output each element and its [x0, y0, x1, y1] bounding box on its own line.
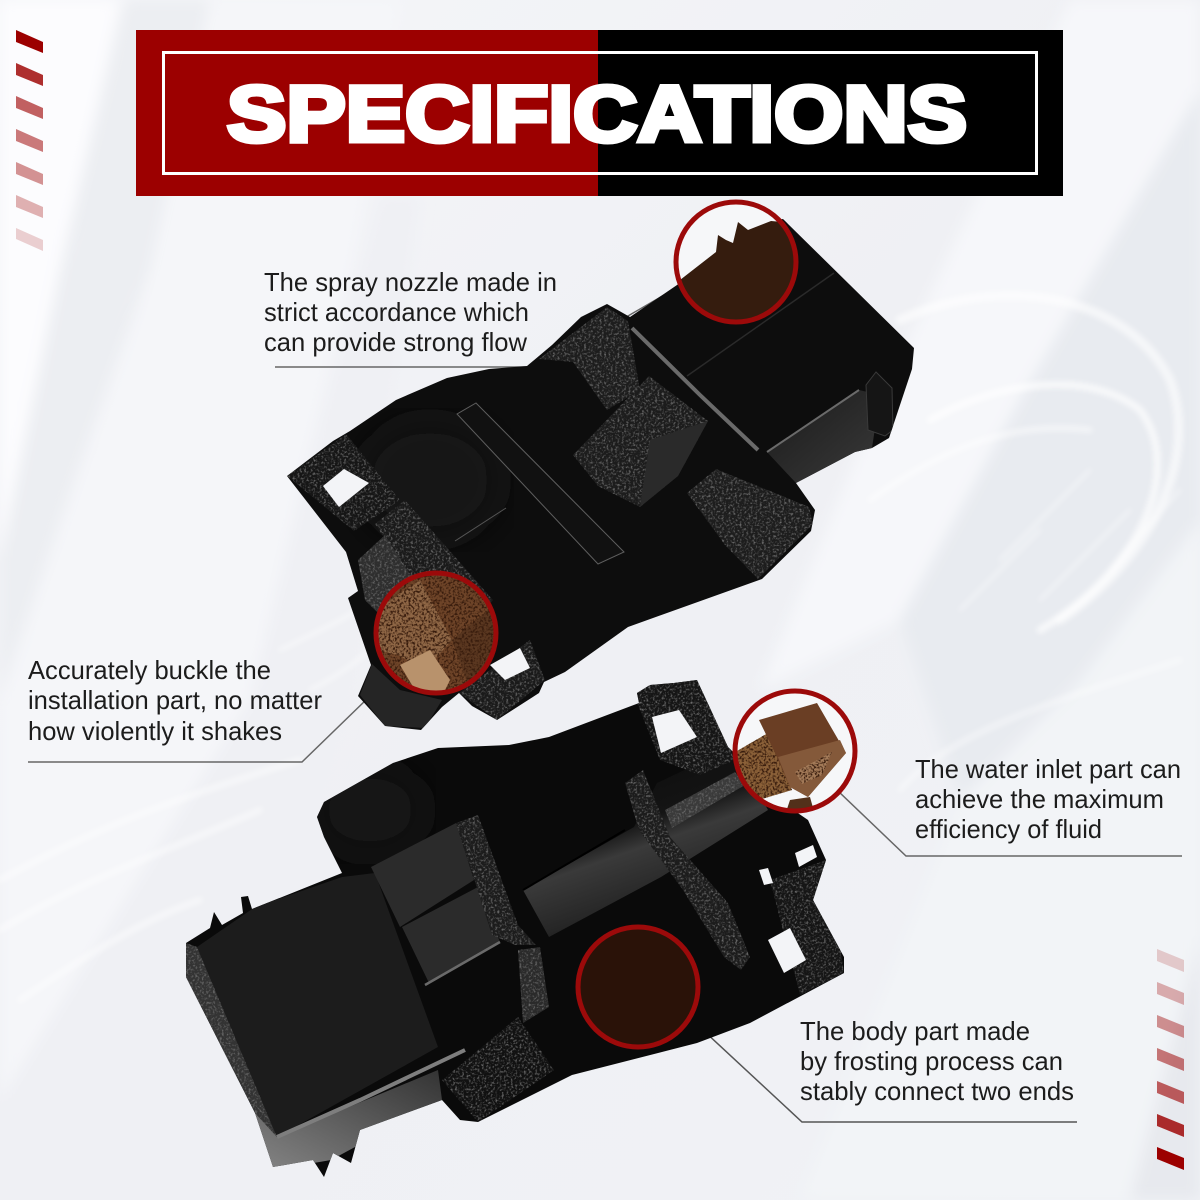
leader line: water inlet — [838, 791, 1182, 856]
box large face — [197, 873, 438, 1137]
leader line: body — [690, 1018, 1077, 1122]
text: water inlet: efficiency of fluid — [915, 814, 1102, 844]
leader line: spray nozzle — [275, 280, 690, 367]
product: lower nozzle — [186, 680, 844, 1177]
flange — [625, 770, 750, 970]
text: body: stably connect two ends — [800, 1076, 1074, 1106]
text: spray nozzle: can provide strong flow — [264, 327, 527, 357]
right decorative stripes — [1157, 949, 1184, 1170]
text: water inlet — [915, 754, 1181, 844]
textured lower tab — [442, 1017, 554, 1122]
title text: SPECIFICATIONS — [227, 69, 967, 158]
callout circle: water inlet — [730, 686, 860, 816]
text: spray nozzle: strict accordance which — [264, 297, 529, 327]
text: buckle: how violently it shakes — [28, 716, 282, 746]
text: spray nozzle — [264, 267, 557, 357]
callout circle: buckle — [374, 570, 498, 696]
callout circle: body — [578, 927, 698, 1047]
text: body: by frosting process can — [800, 1046, 1063, 1076]
box clips — [866, 372, 893, 436]
title banner — [136, 30, 1063, 196]
seams and slot — [457, 403, 624, 564]
box edge and underside — [186, 943, 277, 1137]
left decorative stripes — [16, 30, 43, 251]
nozzle tip — [360, 664, 442, 728]
text: body: The body part made — [800, 1016, 1030, 1046]
product: upper nozzle — [287, 219, 914, 730]
text: body — [800, 1016, 1074, 1106]
text: buckle — [28, 655, 322, 746]
callout circle: spray nozzle — [674, 200, 798, 324]
text: water inlet: The water inlet part can — [915, 754, 1181, 784]
text: spray nozzle: The spray nozzle made in — [264, 267, 557, 297]
water splash — [0, 296, 1180, 1000]
text: water inlet: achieve the maximum — [915, 784, 1164, 814]
pipe — [523, 747, 768, 937]
mounting holes — [323, 469, 369, 507]
side wall of box — [767, 390, 880, 483]
textured strips — [539, 307, 640, 410]
mounting holes — [652, 710, 697, 753]
text: buckle: Accurately buckle the — [28, 655, 271, 685]
leader line: buckle — [28, 698, 368, 762]
rib — [456, 815, 536, 945]
rod — [573, 376, 708, 507]
textured right tabs — [630, 680, 735, 775]
text: buckle: installation part, no matter — [28, 685, 322, 715]
